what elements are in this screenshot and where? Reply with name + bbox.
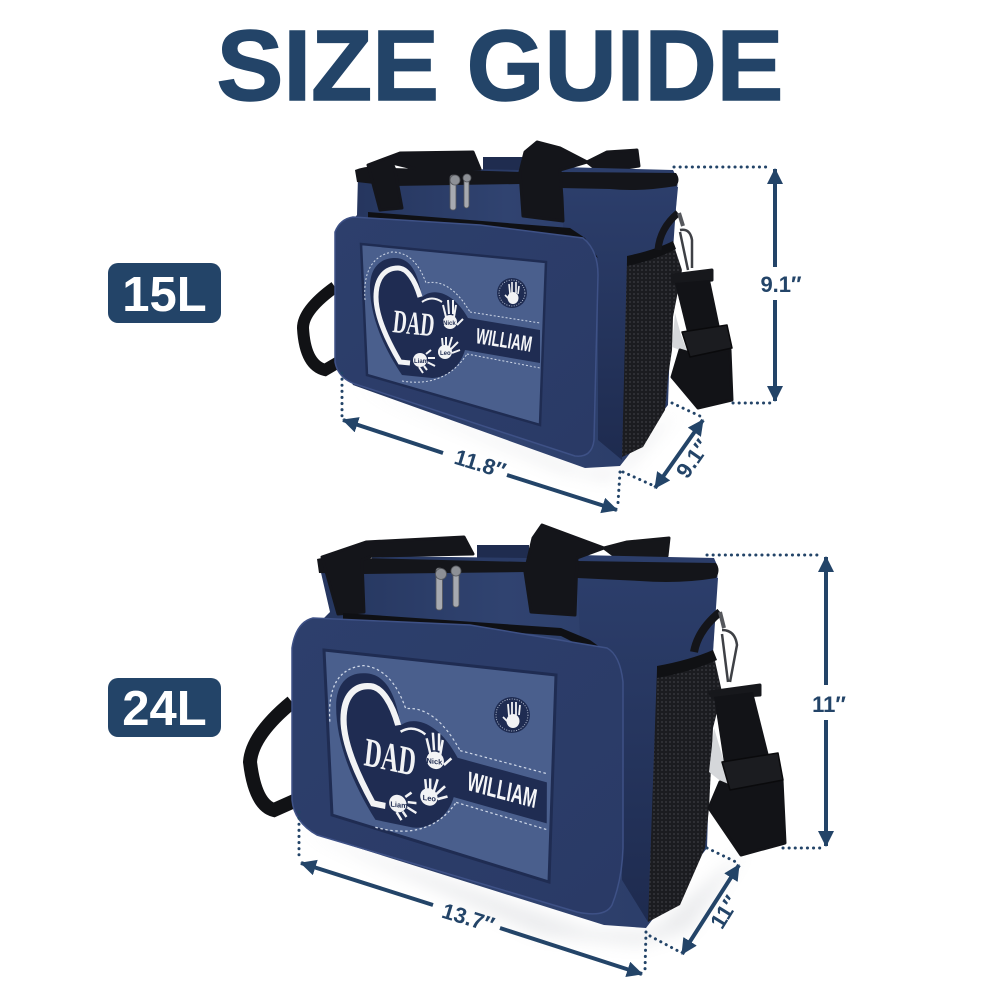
patch artwork: DAD heart: WILLIAM — [465, 766, 539, 814]
patch emblem: hand circle — [494, 697, 530, 733]
fabric patch — [324, 650, 556, 882]
badge: 24L — [108, 678, 221, 737]
patch artwork: DAD heart: Nick — [427, 756, 443, 767]
patch artwork: DAD heart: Liam — [414, 359, 428, 365]
dimensions: 15L — [342, 167, 802, 510]
badge: 15L — [108, 263, 221, 323]
patch artwork: DAD heart: Nick — [443, 321, 456, 327]
mesh side pocket — [622, 241, 688, 457]
patch emblem: hand circle — [497, 278, 527, 308]
mesh side pocket — [648, 650, 732, 922]
shoulder strap with buckle — [694, 612, 785, 855]
front pocket — [292, 613, 623, 914]
patch artwork: DAD heart: WILLIAM — [474, 324, 534, 357]
dimensions: 24L — [299, 555, 846, 974]
zipper pulls — [436, 566, 461, 610]
patch artwork: DAD heart: DAD — [391, 303, 436, 344]
badge: 24L: 24L — [122, 682, 207, 736]
dimensions: 24L: 11″ — [812, 692, 846, 717]
patch artwork: DAD heart — [329, 662, 547, 847]
patch artwork: DAD heart — [365, 252, 540, 382]
hand prints — [413, 300, 463, 373]
hand prints — [389, 728, 451, 825]
24L bag illustration — [250, 525, 785, 945]
zipper pulls — [450, 174, 471, 210]
patch artwork: DAD heart: DAD — [362, 730, 418, 786]
dimensions: 24L: 11″ — [705, 891, 744, 933]
15L bag illustration — [303, 142, 732, 480]
dimensions: 15L: 9.1″ — [760, 272, 802, 297]
patch artwork: DAD heart: Leo — [423, 793, 436, 803]
front pocket — [335, 212, 598, 456]
patch artwork: DAD heart: Liam — [390, 799, 408, 810]
badge: 15L: 15L — [122, 268, 207, 322]
dimensions: 24L: 13.7″ — [439, 898, 498, 938]
front handle — [322, 525, 604, 615]
front handle — [368, 142, 587, 221]
dimensions: 15L: 9.1″ — [671, 434, 715, 483]
patch artwork: DAD heart: Leo — [440, 351, 451, 357]
title: SIZE GUIDE — [217, 10, 783, 122]
dimensions: 15L: 11.8″ — [452, 444, 509, 484]
shoulder strap with buckle — [658, 213, 732, 408]
fabric patch — [361, 244, 546, 425]
